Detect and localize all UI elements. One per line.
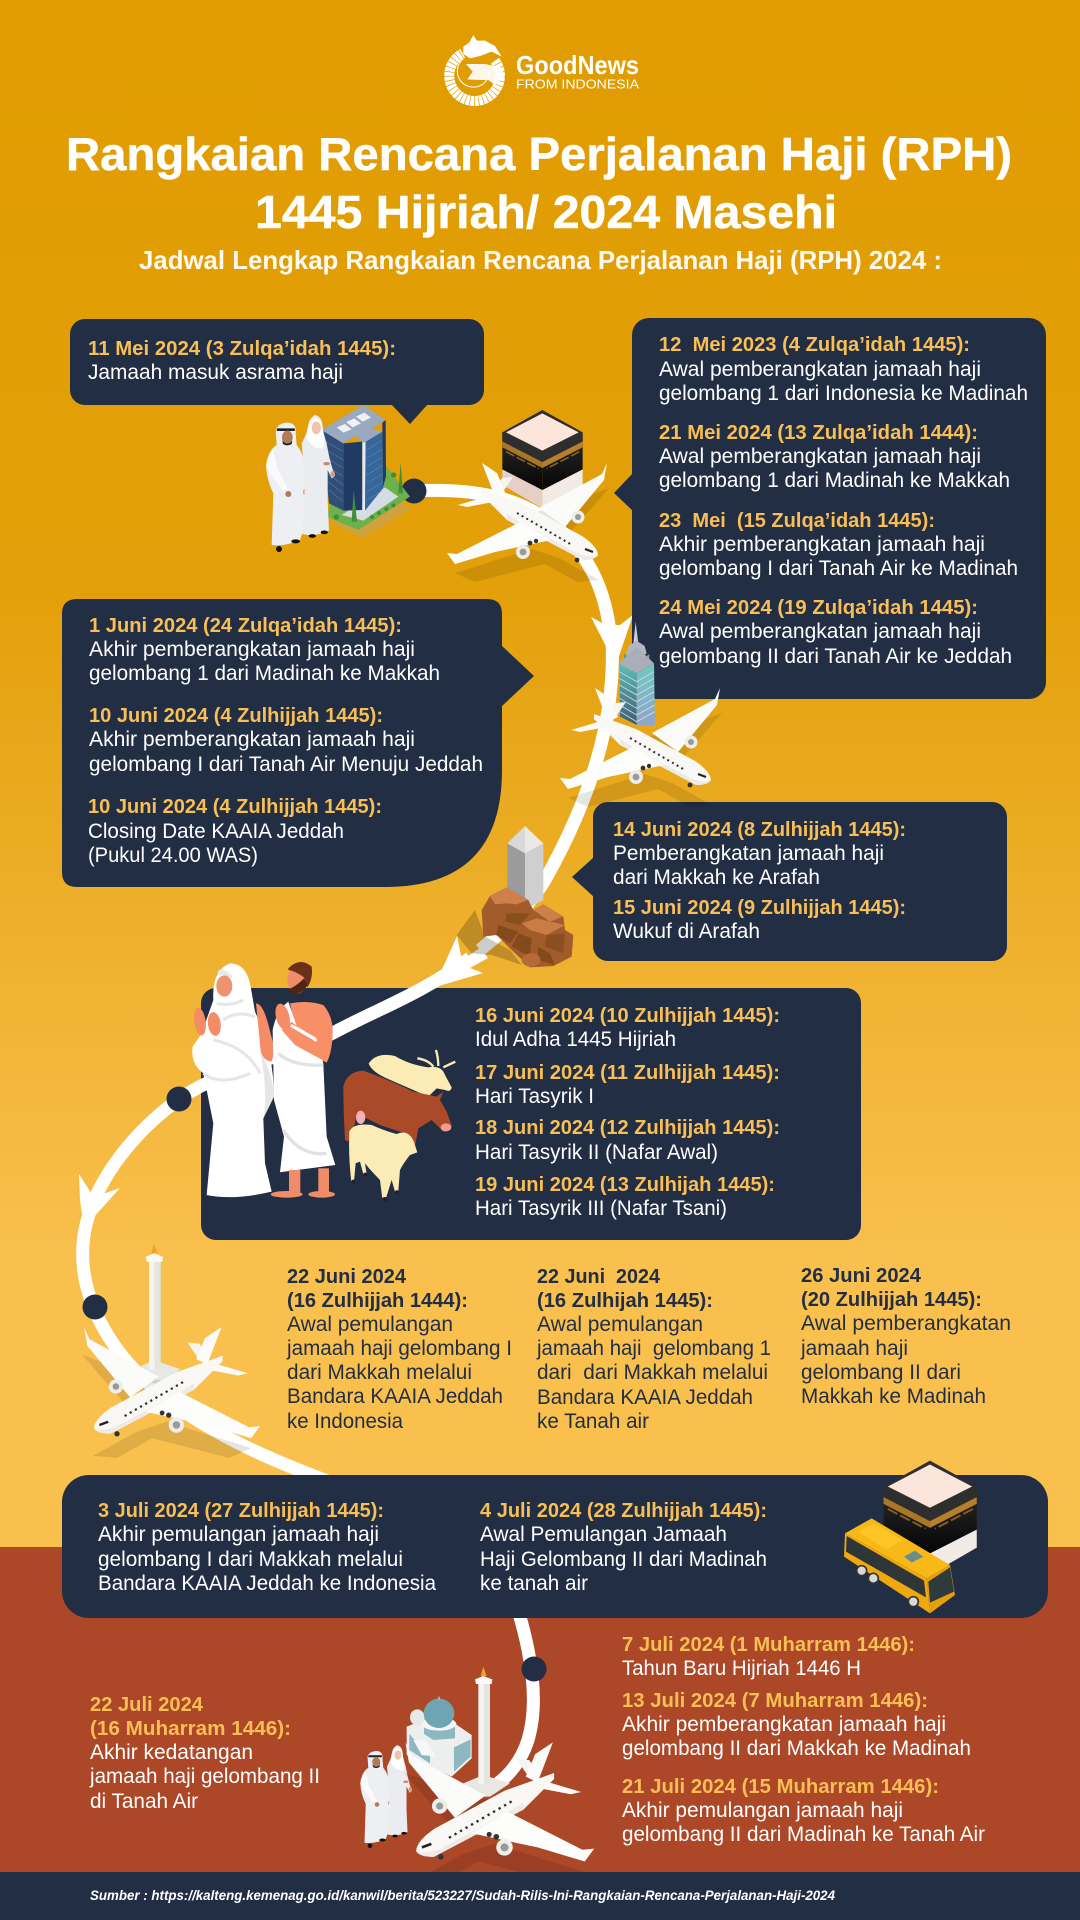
icon: Monas 1 xyxy=(134,1243,181,1384)
schedule entry: 24 Mei: Awal pemberangkatan jamaah haji xyxy=(659,620,981,643)
schedule entry: 14 Juni: 14 Juni 2024 (8 Zulhijjah 1445): xyxy=(613,818,906,841)
schedule entry: 21 Mei: 21 Mei 2024 (13 Zulqa’idah 1444): xyxy=(659,421,978,444)
text: 22 Juli: (16 Muharram 1446): xyxy=(90,1717,291,1740)
schedule entry: 19 Juni: Hari Tasyrik III (Nafar Tsani) xyxy=(475,1197,727,1220)
title: Rangkaian Rencana Perjalanan Haji (RPH) xyxy=(66,128,1012,180)
schedule entry: 19 Juni: 19 Juni 2024 (13 Zulhijah 1445): xyxy=(475,1173,775,1196)
schedule entry: 15 Juni: 15 Juni 2024 (9 Zulhijjah 1445): xyxy=(613,896,906,919)
schedule entry: 13 Juli: gelombang II dari Makkah ke Madinah xyxy=(622,1737,971,1760)
schedule entry: 18 Juni xyxy=(475,1116,780,1164)
text: 22 Juni column 1: Awal pemulangan xyxy=(287,1313,453,1336)
panel: 16-19 Juni xyxy=(201,988,861,1240)
text: 26 Juni column 3 xyxy=(800,1264,1011,1408)
schedule entry: 4 Juli: 4 Juli 2024 (28 Zulhijjah 1445): xyxy=(480,1499,767,1522)
text: 26 Juni column 3: (20 Zulhijjah 1445): xyxy=(801,1288,982,1311)
icon: kaaba top xyxy=(502,410,583,508)
pilgrim man xyxy=(256,962,335,1198)
schedule entry: 3 Juli: Bandara KAAIA Jeddah ke Indonesia xyxy=(98,1572,436,1595)
route line: upper section xyxy=(413,490,633,950)
text: 22 Juni column 2: 22 Juni 2024 xyxy=(537,1265,661,1288)
schedule entry: 23 Mei: 23 Mei (15 Zulqa’idah 1445): xyxy=(659,509,935,532)
text: 22 Juni column 2: (16 Zulhijah 1445): xyxy=(537,1289,713,1312)
subtitle: Jadwal Lengkap Rangkaian Rencana Perjalanan Haji (RPH) 2024 : xyxy=(139,245,942,275)
panel: 12-24 Mei xyxy=(614,318,1046,699)
schedule entry: 3 Juli: 3 Juli 2024 (27 Zulhijjah 1445): xyxy=(98,1499,384,1522)
schedule entry: 21 Juli: gelombang II dari Madinah ke Tanah Air xyxy=(622,1823,985,1846)
schedule entry: 14 Juni: dari Makkah ke Arafah xyxy=(613,866,820,889)
schedule entry: 16 Juni: Idul Adha 1445 Hijriah xyxy=(475,1028,676,1051)
schedule entry: 12 Mei: gelombang 1 dari Indonesia ke Madinah xyxy=(659,382,1028,405)
schedule entry: 10 Juni xyxy=(89,704,483,776)
schedule entry: 19 Juni xyxy=(475,1173,775,1220)
icon: building and couple xyxy=(266,405,412,552)
schedule entry: 14 Juni xyxy=(613,818,906,889)
schedule entry: 21 Juli: Akhir pemulangan jamaah haji xyxy=(622,1799,903,1822)
panel: 11 Mei xyxy=(70,319,484,424)
logo xyxy=(449,35,640,101)
text: 26 Juni column 3: 26 Juni 2024 xyxy=(801,1264,922,1287)
schedule entry: 1 Juni: Akhir pemberangkatan jamaah haji xyxy=(89,638,415,661)
icon: bus xyxy=(844,1518,955,1613)
schedule entry: 3 Juli xyxy=(98,1499,436,1595)
schedule entry: 17 Juni: 17 Juni 2024 (11 Zulhijjah 1445): xyxy=(475,1061,780,1084)
text: 22 Juni column 2: Bandara KAAIA Jeddah xyxy=(537,1386,753,1409)
panel: 3-4 Juli xyxy=(62,1475,1048,1618)
brand name: GoodNews xyxy=(516,50,639,80)
icon: arrival scene with mosque, Monas, couple xyxy=(360,1667,594,1883)
icon: sacrificial animals xyxy=(343,1050,455,1202)
schedule entry: 15 Juni xyxy=(613,896,906,943)
schedule entry: 14 Juni: Pemberangkatan jamaah haji xyxy=(613,842,884,865)
icon: eagle emblem xyxy=(449,35,504,101)
text: 22 Juni column 2: dari dari Makkah melalui xyxy=(537,1361,768,1384)
schedule entry: 13 Juli xyxy=(622,1689,971,1760)
icon: couple small xyxy=(360,1745,412,1848)
schedule entry: 4 Juli: ke tanah air xyxy=(480,1572,588,1595)
date heading: 11 Mei 2024 (3 Zulqa’idah 1445): xyxy=(88,337,396,360)
schedule entry: closing date xyxy=(88,795,382,867)
text: 22 Juli xyxy=(89,1693,320,1813)
text: 22 Juli: jamaah haji gelombang II xyxy=(89,1765,320,1788)
schedule entry: 21 Mei: Awal pemberangkatan jamaah haji xyxy=(659,445,981,468)
schedule entry: 1 Juni: gelombang 1 dari Madinah ke Makkah xyxy=(89,662,440,685)
schedule entry: 12 Mei: Awal pemberangkatan jamaah haji xyxy=(659,358,981,381)
icon: plane 2 xyxy=(560,688,722,807)
schedule entry: 18 Juni: Hari Tasyrik II (Nafar Awal) xyxy=(475,1141,718,1164)
schedule entry: 7 Juli: Tahun Baru Hijriah 1446 H xyxy=(622,1657,861,1680)
schedule entry: 17 Juni xyxy=(475,1061,780,1108)
schedule entry: 4 Juli: Awal Pemulangan Jamaah xyxy=(480,1523,727,1546)
schedule entry: 23 Mei: Akhir pemberangkatan jamaah haji xyxy=(659,533,985,556)
schedule entry: closing date: 10 Juni 2024 (4 Zulhijjah 1445): xyxy=(88,795,382,818)
schedule entry: 7 Juli xyxy=(622,1633,915,1680)
text: 22 Juni column 1: 22 Juni 2024 xyxy=(287,1265,407,1288)
title xyxy=(66,128,1012,238)
icon: kaaba and bus xyxy=(844,1461,977,1613)
schedule entry: 24 Mei: gelombang II dari Tanah Air ke Jeddah xyxy=(659,645,1012,668)
text: 26 Juni column 3: Awal pemberangkatan xyxy=(801,1312,1011,1335)
cow xyxy=(343,1071,452,1147)
schedule entry: 23 Mei: gelombang I dari Tanah Air ke Madinah xyxy=(659,557,1018,580)
icon: pilgrims praying xyxy=(192,962,335,1198)
schedule entry: 12 Mei: 12 Mei 2023 (4 Zulqa’idah 1445): xyxy=(659,333,970,356)
schedule entry: 1 Juni xyxy=(89,614,440,685)
schedule entry: 15 Juni: Wukuf di Arafah xyxy=(613,920,760,943)
schedule entry: 10 Juni: 10 Juni 2024 (4 Zulhijjah 1445): xyxy=(89,704,383,727)
schedule entry: 21 Mei: gelombang 1 dari Madinah ke Makkah xyxy=(659,469,1010,492)
description: Jamaah masuk asrama haji xyxy=(88,361,343,384)
text: 26 Juni column 3: jamaah haji xyxy=(800,1337,908,1360)
text: 22 Juni column 2: ke Tanah air xyxy=(537,1410,649,1433)
text: 22 Juli: di Tanah Air xyxy=(90,1790,198,1813)
source text: Sumber : https://kalteng.kemenag.go.id/kanwil/berita/523227/Sudah-Rilis-Ini-Rangkaian-Rencana-Perjalanan-Haji-2024 xyxy=(90,1887,835,1903)
schedule entry: 21 Juli: 21 Juli 2024 (15 Muharram 1446): xyxy=(622,1775,939,1798)
brand tagline: FROM INDONESIA xyxy=(516,78,640,92)
panel: 1-10 Juni xyxy=(62,599,534,887)
schedule entry: closing date: (Pukul 24.00 WAS) xyxy=(88,844,258,867)
text: 22 Juli: Akhir kedatangan xyxy=(90,1741,253,1764)
schedule entry: 3 Juli: Akhir pemulangan jamaah haji xyxy=(98,1523,379,1546)
text: 22 Juni column 1: ke Indonesia xyxy=(287,1410,403,1433)
text: 22 Juni column 1: Bandara KAAIA Jeddah xyxy=(287,1385,503,1408)
icon: plane 1 xyxy=(447,463,609,582)
schedule entry: 16 Juni: 16 Juni 2024 (10 Zulhijjah 1445): xyxy=(475,1004,780,1027)
pilgrim woman xyxy=(192,963,274,1197)
schedule entry: 18 Juni: 18 Juni 2024 (12 Zulhijjah 1445): xyxy=(475,1116,780,1139)
schedule entry: 24 Mei xyxy=(659,596,1012,668)
text: 22 Juni column 2: jamaah haji gelombang 1 xyxy=(536,1337,771,1360)
schedule entry: 1 Juni: 1 Juni 2024 (24 Zulqa’idah 1445): xyxy=(89,614,402,637)
text: 22 Juli: 22 Juli 2024 xyxy=(90,1693,204,1716)
icon: Jeddah tower xyxy=(619,622,655,725)
route line: middle section xyxy=(79,936,488,1484)
schedule entry: 4 Juli xyxy=(480,1499,767,1595)
route line: lower section xyxy=(488,1610,533,1790)
schedule entry: 21 Mei xyxy=(659,421,1010,492)
icon: Arafah rock and obelisk xyxy=(457,826,573,967)
footer bar xyxy=(0,1872,1080,1920)
schedule entry: 4 Juli: Haji Gelombang II dari Madinah xyxy=(480,1548,767,1571)
icon: mosque xyxy=(407,1697,472,1777)
text: 22 Juni column 1: jamaah haji gelombang I xyxy=(286,1337,512,1360)
schedule entry: 10 Juni: Akhir pemberangkatan jamaah haji xyxy=(89,728,415,751)
schedule entry: 12 Mei xyxy=(659,333,1028,405)
text: 22 Juni column 1 xyxy=(286,1265,512,1433)
route marker dots xyxy=(82,478,546,1682)
text: 26 Juni column 3: gelombang II dari xyxy=(801,1361,961,1384)
goat xyxy=(369,1050,455,1097)
icon: Monas 2 xyxy=(463,1667,510,1797)
schedule entry: closing date: Closing Date KAAIA Jeddah xyxy=(88,820,344,843)
text: 7-21 Juli xyxy=(622,1633,985,1846)
schedule entry: 10 Juni: gelombang I dari Tanah Air Menuju Jeddah xyxy=(89,753,483,776)
icon: plane 3 xyxy=(82,1327,260,1458)
schedule entry: 7 Juli: 7 Juli 2024 (1 Muharram 1446): xyxy=(622,1633,915,1656)
schedule entry: 16 Juni xyxy=(475,1004,780,1051)
panel: 14-15 Juni xyxy=(572,802,1007,961)
icon: plane 4 xyxy=(403,1742,594,1883)
text: 22 Juni column 2: Awal pemulangan xyxy=(537,1313,703,1336)
schedule entry: 24 Mei: 24 Mei 2024 (19 Zulqa’idah 1445): xyxy=(659,596,978,619)
title: 1445 Hijriah/ 2024 Masehi xyxy=(255,186,837,238)
sheep xyxy=(349,1125,417,1202)
text: 22 Juni column 1: dari Makkah melalui xyxy=(287,1361,472,1384)
schedule entry: 17 Juni: Hari Tasyrik I xyxy=(475,1085,594,1108)
schedule entry: 21 Juli xyxy=(622,1775,985,1846)
schedule entry: 23 Mei xyxy=(659,509,1018,580)
schedule entry: 3 Juli: gelombang I dari Makkah melalui xyxy=(98,1548,403,1571)
schedule entry: 13 Juli: 13 Juli 2024 (7 Muharram 1446): xyxy=(622,1689,928,1712)
text: 22 Juni column 1: (16 Zulhijjah 1444): xyxy=(287,1289,468,1312)
schedule entry: 13 Juli: Akhir pemberangkatan jamaah haji xyxy=(622,1713,946,1736)
text: 26 Juni column 3: Makkah ke Madinah xyxy=(801,1385,986,1408)
text: 22 Juni column 2 xyxy=(536,1265,771,1433)
